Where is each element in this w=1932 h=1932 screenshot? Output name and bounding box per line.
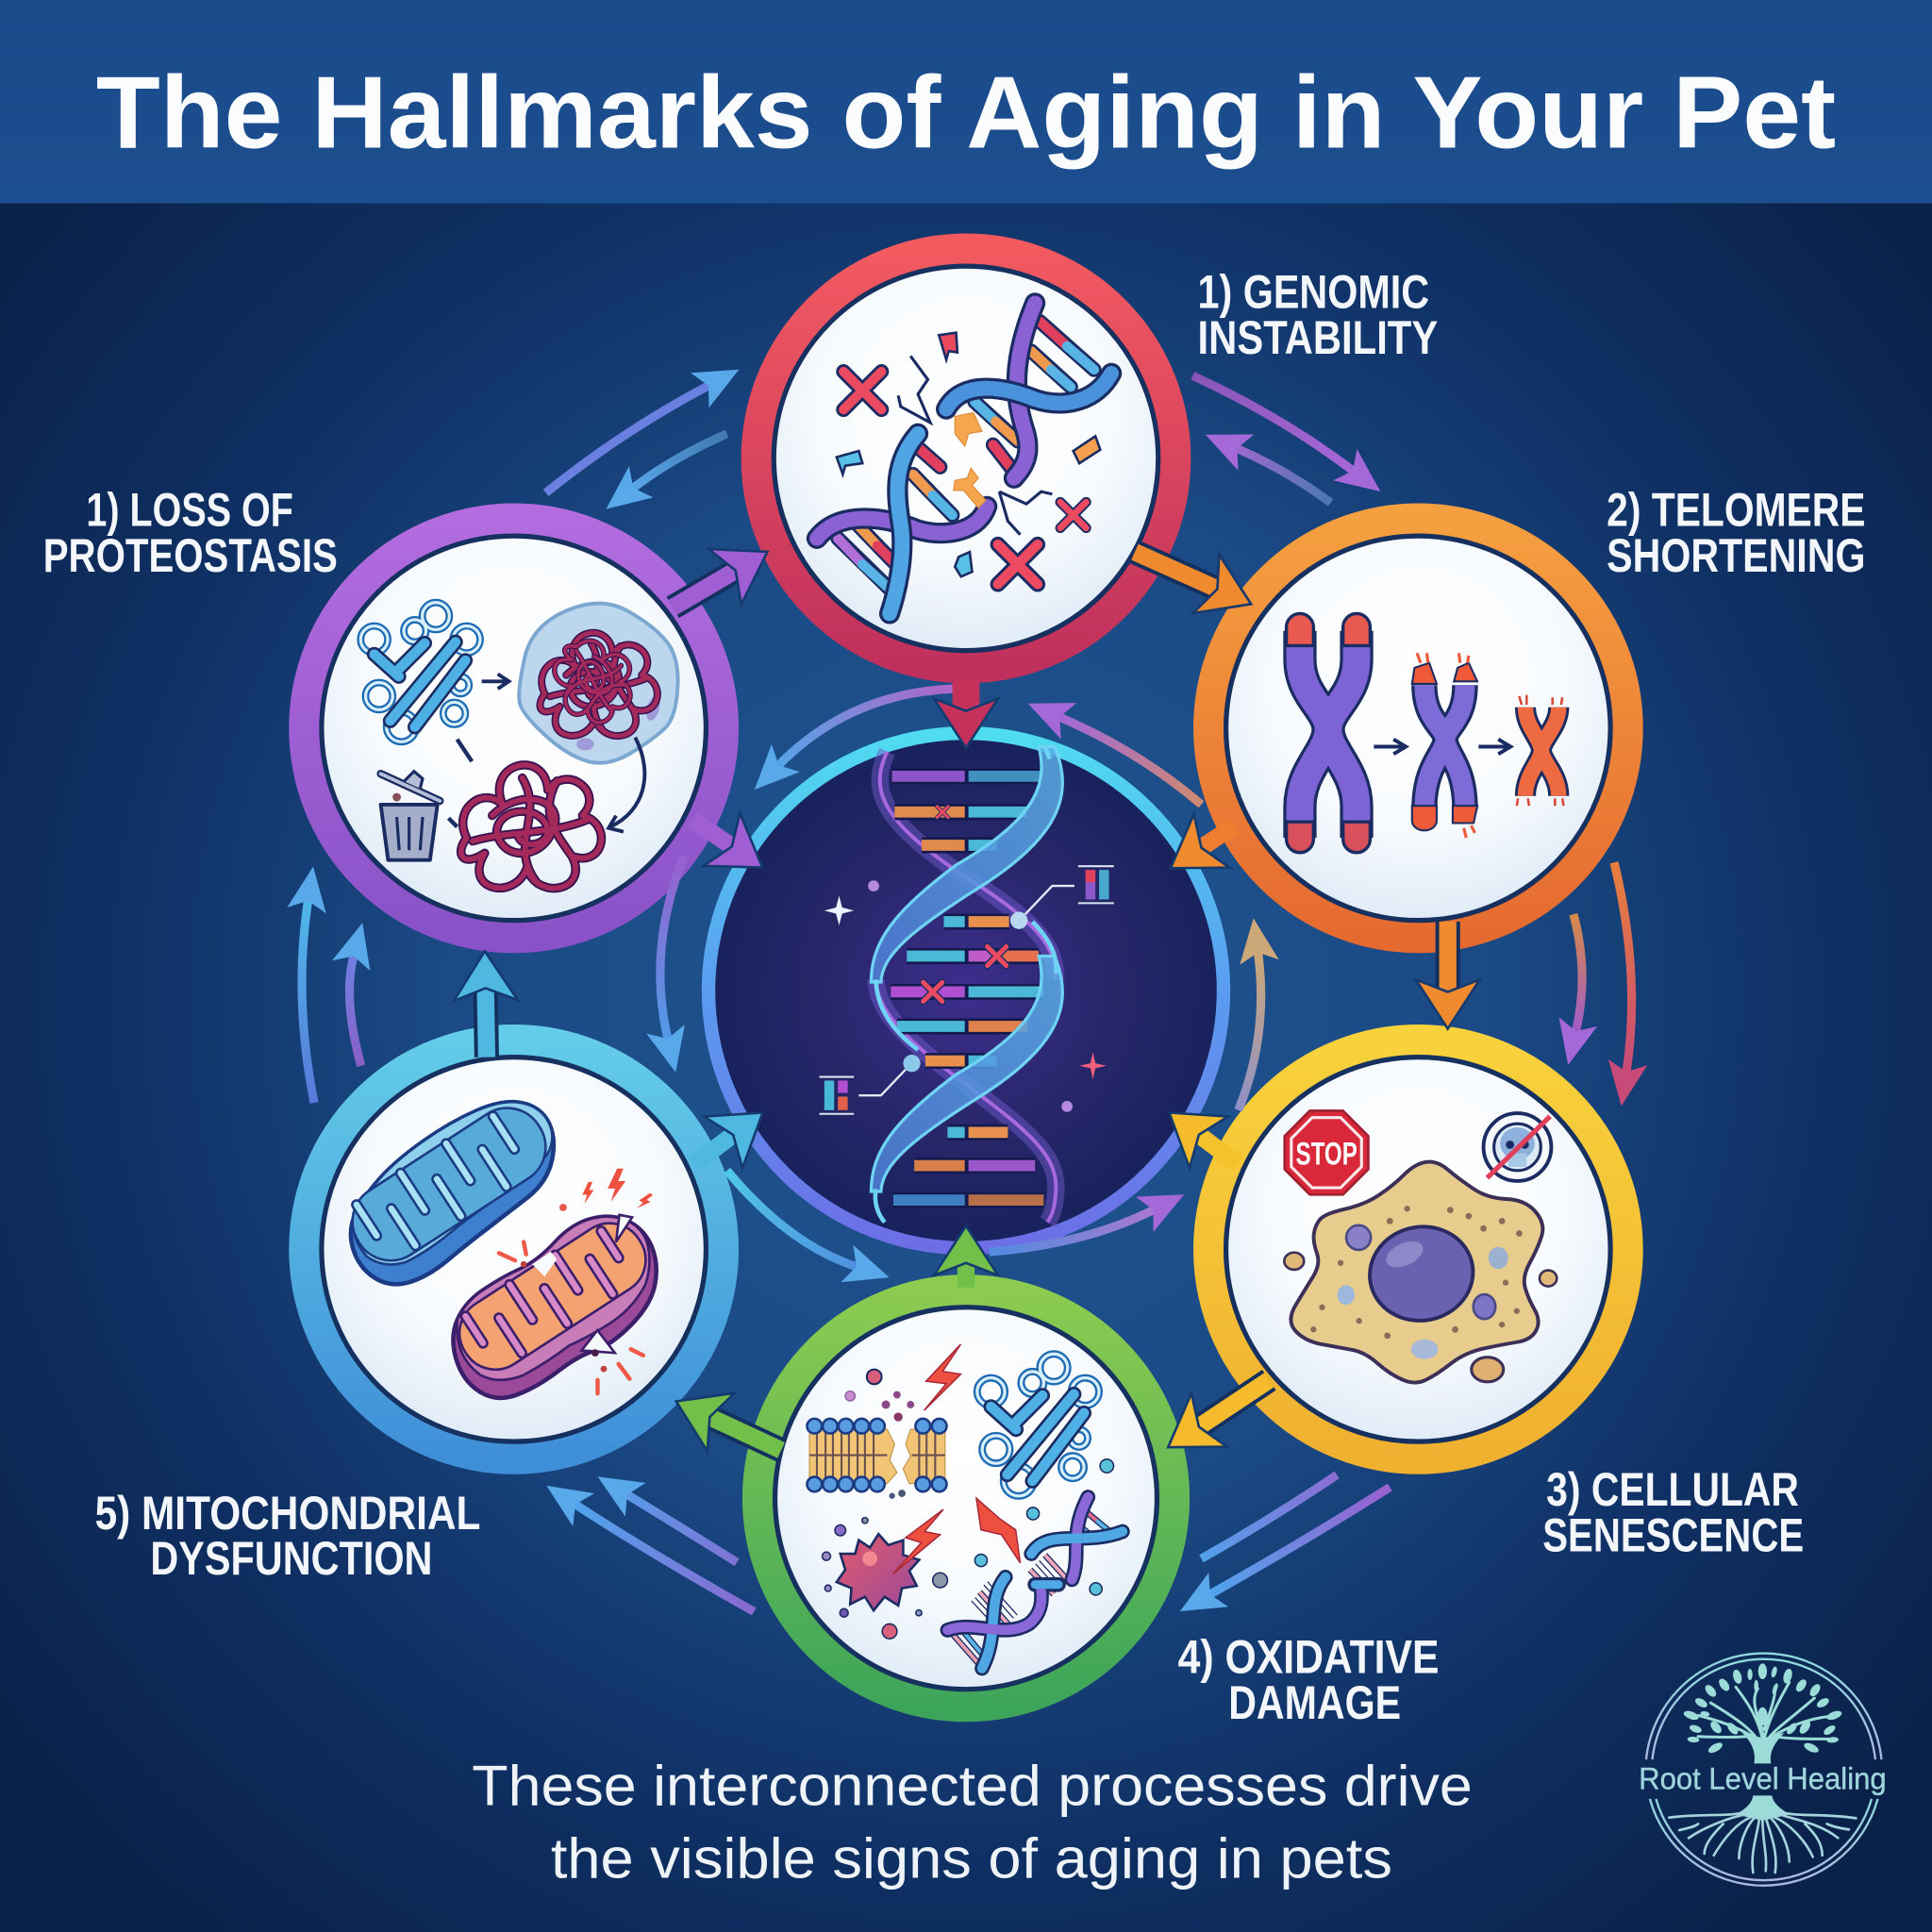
central DNA helix — [820, 747, 1114, 1223]
icon: chromosomes — [1287, 613, 1563, 853]
label: cellular senescence: 3) CELLULAR — [1546, 1463, 1799, 1516]
thin arrows: top left — [546, 386, 727, 492]
damage marks — [937, 807, 948, 818]
title: The Hallmarks of Aging in Your Pet — [96, 56, 1836, 170]
label: loss of proteostasis: 1) LOSS OF — [86, 484, 293, 537]
icon: trash can — [381, 772, 440, 860]
label: genomic instability: INSTABILITY — [1198, 311, 1438, 364]
label: mitochondrial dysfunction — [95, 1487, 480, 1585]
label: mitochondrial dysfunction: DYSFUNCTION — [150, 1532, 432, 1585]
label: loss of proteostasis: PROTEOSTASIS — [43, 529, 338, 582]
label: oxidative damage — [1178, 1631, 1440, 1729]
label: mitochondrial dysfunction: 5) MITOCHONDRIAL — [95, 1487, 480, 1540]
closing statement: the visible signs of aging in pets — [551, 1827, 1392, 1890]
icon: roots — [1669, 1795, 1856, 1873]
icon: healthy mitochondrion — [339, 1094, 559, 1284]
label: oxidative damage: 4) OXIDATIVE — [1178, 1631, 1440, 1684]
icon: free radical — [823, 1459, 1113, 1639]
label: telomere shortening: SHORTENING — [1607, 529, 1865, 582]
rungs — [891, 776, 1043, 1200]
logo: Root Level Healing — [1639, 1654, 1887, 1886]
thin arrows: left — [302, 901, 361, 1103]
thin arrows: top right — [1192, 375, 1353, 503]
icon: stop sign: STOP — [1296, 1136, 1357, 1172]
label: cellular senescence — [1542, 1463, 1804, 1561]
icon: damaged membrane — [808, 1344, 960, 1499]
central disc with ring — [708, 733, 1224, 1248]
logo wordmark: Root Level Healing — [1639, 1760, 1887, 1795]
panel: telomere shortening — [1210, 520, 1626, 937]
icon: misfolded protein — [360, 603, 480, 741]
stars and dots — [824, 896, 854, 925]
icon: damaged protein — [977, 1354, 1099, 1496]
label: genomic instability — [1198, 266, 1438, 364]
icon: senescent cell — [1284, 1110, 1557, 1383]
label: telomere shortening: 2) TELOMERE — [1607, 484, 1865, 537]
icon: broken DNA — [817, 303, 1111, 613]
label: oxidative damage: DAMAGE — [1228, 1676, 1401, 1729]
icon: aggregate in cell — [482, 604, 678, 763]
callouts — [1010, 912, 1027, 929]
icon: tree — [1683, 1663, 1843, 1763]
icon: damaged DNA — [947, 1497, 1123, 1668]
icon: stop sign — [1285, 1110, 1368, 1194]
panel: loss of proteostasis — [306, 520, 722, 937]
thick arrows into center — [692, 681, 1239, 1288]
header banner — [0, 0, 1932, 204]
inner arc arrows — [660, 689, 1261, 1267]
label: cellular senescence: SENESCENCE — [1542, 1508, 1804, 1561]
icon: damaged mitochondrion — [446, 1169, 658, 1398]
label: loss of proteostasis — [43, 484, 338, 582]
thin arrows: bottom left — [575, 1494, 754, 1611]
front ribbons — [871, 747, 1062, 982]
panel: cellular senescence — [1210, 1041, 1626, 1457]
label: genomic instability: 1) GENOMIC — [1198, 266, 1429, 319]
icon: tangled aggregate — [448, 738, 644, 889]
icon: no-death symbol — [1484, 1113, 1551, 1181]
panel: mitochondrial dysfunction — [306, 1041, 722, 1457]
closing statement — [472, 1754, 1473, 1890]
panel: genomic instability — [758, 250, 1174, 667]
thin arrows: bottom right — [1201, 1474, 1390, 1594]
closing statement: These interconnected processes drive — [472, 1754, 1473, 1817]
thin arrows: right — [1574, 862, 1632, 1072]
label: telomere shortening — [1607, 484, 1865, 582]
panel: oxidative damage — [759, 1291, 1173, 1706]
thick arrows between hallmarks — [486, 552, 1448, 1450]
